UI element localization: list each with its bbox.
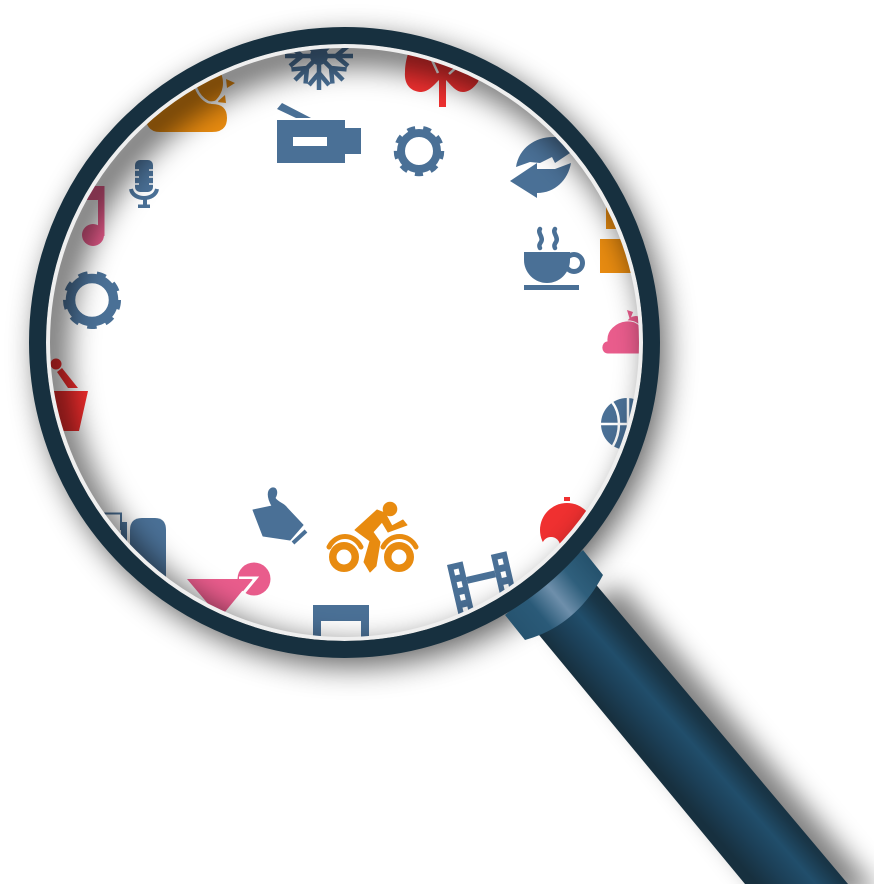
icon: orange cloud and sun bbox=[147, 75, 235, 132]
icon: orange motorbike rider bbox=[329, 502, 416, 572]
icon: pink cocktail bbox=[187, 562, 270, 612]
icon: music note bbox=[80, 186, 104, 246]
lens inner shadow bbox=[50, 48, 666, 664]
icon: thumbs up bbox=[253, 488, 306, 543]
icon: blue container bbox=[104, 512, 166, 577]
handle collar bbox=[505, 550, 603, 640]
icon: video camera bbox=[277, 103, 361, 163]
lens glass bbox=[48, 46, 640, 638]
icon: refresh arrows bbox=[510, 137, 571, 198]
icon: basketball bbox=[601, 398, 634, 449]
icons seen through the lens bbox=[50, 48, 639, 636]
icon: red bow bbox=[404, 54, 478, 107]
icon: orange gift bbox=[600, 207, 631, 273]
lens dark ring bbox=[38, 36, 652, 650]
icon: blue table bbox=[313, 605, 369, 636]
handle bbox=[520, 562, 848, 884]
icon: gear top bbox=[396, 128, 442, 174]
icon: pink cloud and sun bbox=[602, 310, 639, 354]
lens white rim bbox=[48, 46, 641, 639]
icon: snowflake bbox=[285, 48, 353, 90]
handle shadow bbox=[555, 585, 874, 884]
icon: coffee cup bbox=[524, 229, 582, 290]
icon: red cloche bbox=[540, 497, 586, 544]
icon: film strip bbox=[447, 551, 514, 614]
icon: red mortar and pestle bbox=[50, 358, 88, 431]
icon: microphone bbox=[131, 160, 157, 208]
icon: gear left bbox=[66, 274, 118, 326]
lens shadow bbox=[37, 37, 667, 667]
